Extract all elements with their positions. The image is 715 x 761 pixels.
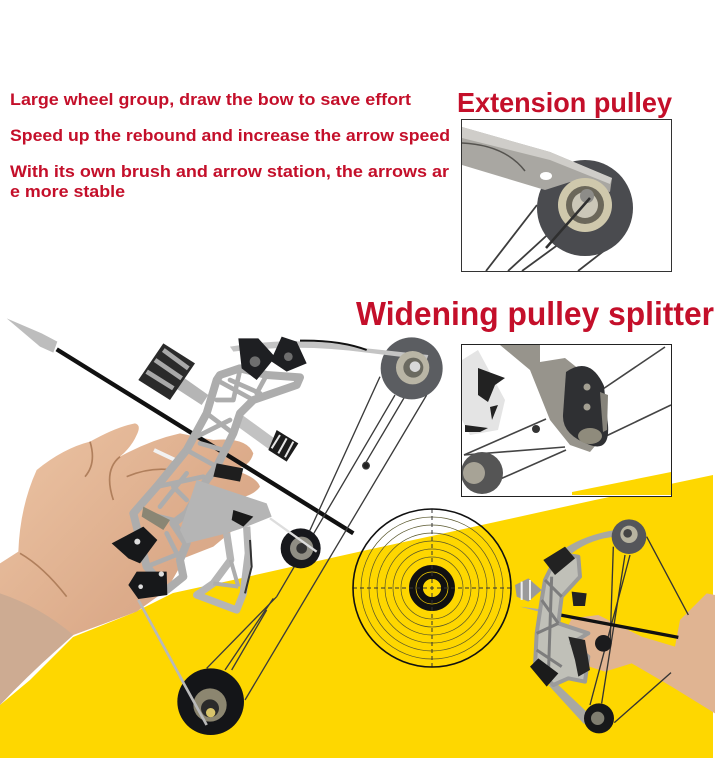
strings: [590, 537, 688, 723]
panel: extension pulley photo: [462, 120, 672, 272]
bottom pulley: [584, 703, 614, 733]
brush rest: [154, 450, 177, 461]
grip frame: [180, 480, 272, 610]
feature line 2: Speed up the rebound and increase the arrow speed: [10, 126, 450, 145]
feature line 3 continued: e more stable: [10, 182, 125, 201]
frame: [515, 547, 590, 687]
center pulley: [595, 635, 612, 652]
hands and forearm: [562, 593, 715, 713]
top pulley: [612, 519, 646, 554]
arrow rest: [213, 463, 243, 482]
logo plate: [142, 507, 170, 530]
yellow background band: [0, 475, 713, 758]
hand: [0, 423, 260, 705]
limbs: [548, 530, 617, 727]
string group: [207, 377, 427, 700]
arrow: [520, 607, 678, 637]
feature line 1: Large wheel group, draw the bow to save effort: [10, 90, 411, 109]
main bow held in hand: [0, 318, 443, 735]
lower limb: [138, 600, 207, 725]
riser lattice: [133, 368, 300, 590]
feature list: [10, 90, 450, 201]
upper limb and pulley: [230, 337, 443, 399]
sight pieces: [138, 343, 298, 462]
feature line 3: With its own brush and arrow station, the arrows ar: [10, 162, 449, 181]
heading: extension pulley: Extension pulley: [457, 87, 672, 118]
upper black cam: [238, 337, 307, 380]
lower black cam: [112, 527, 167, 599]
panel: widening pulley splitter photo: [461, 344, 672, 496]
small bow being drawn: [515, 519, 715, 733]
arrow: [7, 318, 353, 533]
mid pulley: [270, 518, 321, 568]
lower pulley: [177, 668, 244, 735]
target: [353, 509, 511, 667]
